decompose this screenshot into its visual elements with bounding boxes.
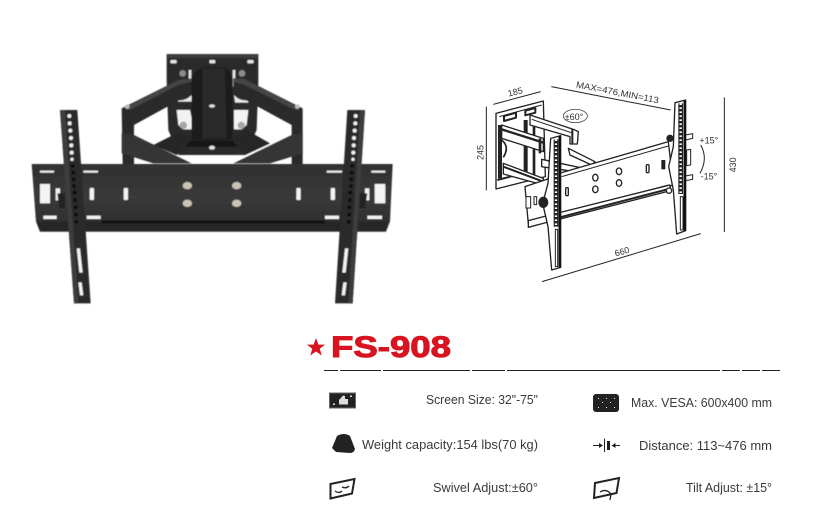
dimension lines (486, 87, 724, 282)
dimension labels: 245 (475, 145, 485, 160)
spec: max VESA (593, 394, 772, 412)
icon: swivel (330, 479, 354, 498)
front arms (502, 125, 543, 152)
back plate (496, 101, 545, 189)
distance label: Distance: 113~476 mm (639, 439, 772, 453)
TV rail (525, 142, 673, 224)
rail holes (593, 174, 598, 181)
dimension labels: 185 (507, 85, 524, 99)
left vertical bracket (60, 110, 91, 303)
icon: tilt (594, 478, 619, 500)
rear arm (530, 115, 578, 144)
dimension labels: ±60° (565, 112, 584, 122)
max VESA label: Max. VESA: 600x400 mm (631, 396, 772, 410)
weight capacity label: Weight capacity:154 lbs(70 kg) (362, 438, 538, 452)
icon: red star (307, 338, 325, 356)
screen size label: Screen Size: 32"-75" (426, 393, 538, 407)
spec: tilt adjust (594, 478, 772, 500)
dimension labels: 430 (728, 157, 738, 172)
product photo: TV wall mount (32, 54, 393, 303)
spec: swivel adjust (330, 479, 538, 498)
icon: VESA (593, 394, 619, 412)
dimension labels (475, 79, 738, 259)
mount line art (496, 100, 693, 270)
right bracket (669, 100, 686, 234)
spec: distance (593, 438, 772, 453)
right vertical bracket (335, 110, 365, 303)
struts (568, 148, 595, 165)
icon: weight (332, 434, 355, 453)
dimension labels: +15° (699, 135, 719, 145)
swing arms (122, 78, 303, 165)
left bracket (543, 136, 561, 270)
swivel adjust label: Swivel Adjust:±60° (433, 481, 538, 495)
wall plate (167, 54, 258, 155)
spec: weight capacity (332, 434, 538, 453)
dimension labels: 660 (613, 245, 631, 259)
spec: screen size (330, 393, 538, 408)
dimension labels: MAX=476,MIN=113 (575, 79, 660, 105)
tilt adjust label: Tilt Adjust: ±15° (686, 481, 772, 495)
technical line drawing with dimensions (475, 79, 738, 282)
icon: screen (330, 393, 356, 408)
dimension labels: -15° (701, 171, 718, 181)
title: model number: FS-908 (331, 331, 451, 364)
main horizontal rail (32, 164, 393, 232)
icon: distance arrows (593, 438, 620, 452)
